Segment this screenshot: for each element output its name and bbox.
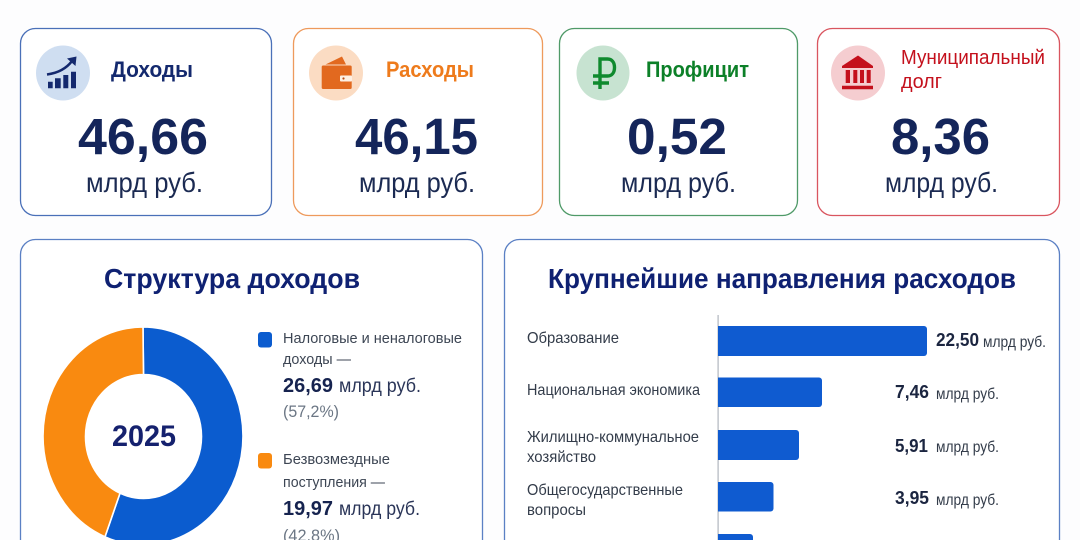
card: municipal debt: [818, 28, 1060, 216]
row: housing and utilities: [527, 429, 999, 466]
label: municipal debt: Муниципальный: [901, 47, 1045, 69]
row: national economy: млрд руб.: [936, 386, 999, 403]
row: housing and utilities: хозяйство: [527, 449, 596, 466]
icon: rising bar chart: [36, 46, 90, 100]
icon: wallet: [309, 46, 363, 100]
unit: surplus: млрд руб.: [621, 167, 736, 198]
row: national economy: [527, 378, 999, 407]
label: expenses: Расходы: [386, 57, 474, 82]
legend: tax and non-tax income: Налоговые и неналоговые: [283, 330, 462, 347]
legend: tax and non-tax income: (57,2%): [283, 402, 339, 421]
row: housing and utilities: млрд руб.: [936, 439, 999, 456]
label: income: Доходы: [111, 57, 193, 82]
row: education: Образование: [527, 330, 619, 347]
legend: gratuitous receipts: [258, 451, 420, 540]
unit: expenses: млрд руб.: [359, 167, 475, 198]
bar chart: [527, 315, 1046, 540]
value: income: 46,66: [78, 108, 208, 165]
panel: income structure: [20, 240, 482, 540]
unit: income: млрд руб.: [86, 167, 203, 198]
icon: bank building: [831, 46, 885, 100]
legend: gratuitous receipts: Безвозмездные: [283, 451, 390, 468]
row: education: млрд руб.: [983, 334, 1046, 351]
donut centre year: 2025: [112, 420, 176, 453]
legend: tax and non-tax income: 26,69: [283, 375, 333, 397]
row: cropped fifth bar: [718, 534, 753, 540]
unit: municipal debt: млрд руб.: [885, 167, 998, 198]
row: education: [527, 326, 1046, 356]
legend: tax and non-tax income: доходы —: [283, 351, 351, 368]
label: municipal debt: [901, 47, 1045, 93]
icon: ruble sign: [576, 46, 630, 100]
card: surplus: [560, 28, 798, 216]
row: national economy: Национальная экономика: [527, 382, 700, 399]
heading: income structure: Структура доходов: [104, 263, 360, 294]
legend: tax and non-tax income: [258, 330, 462, 421]
label: municipal debt: долг: [901, 71, 942, 93]
row: education: 22,50: [936, 330, 979, 350]
row: housing and utilities: 5,91: [895, 436, 928, 456]
row: general state issues: вопросы: [527, 502, 586, 519]
row: general state issues: 3,95: [895, 488, 929, 508]
value: expenses: 46,15: [355, 108, 478, 165]
legend: tax and non-tax income: млрд руб.: [339, 375, 421, 397]
donut chart: [43, 327, 243, 540]
row: general state issues: млрд руб.: [936, 492, 999, 509]
value: surplus: 0,52: [627, 108, 727, 165]
card: income: [20, 28, 272, 216]
panel: largest expense areas: [504, 240, 1060, 540]
row: general state issues: [527, 482, 999, 519]
card: expenses: [294, 28, 542, 216]
legend: gratuitous receipts: 19,97: [283, 498, 333, 520]
legend: gratuitous receipts: млрд руб.: [339, 498, 420, 520]
heading: largest expense areas: Крупнейшие направления расходов: [548, 263, 1016, 294]
row: general state issues: Общегосударственные: [527, 482, 683, 499]
row: national economy: 7,46: [895, 382, 929, 402]
value: municipal debt: 8,36: [891, 108, 990, 165]
label: surplus: Профицит: [646, 57, 749, 82]
row: housing and utilities: Жилищно-коммунальное: [527, 429, 699, 446]
legend: gratuitous receipts: поступления —: [283, 474, 385, 491]
